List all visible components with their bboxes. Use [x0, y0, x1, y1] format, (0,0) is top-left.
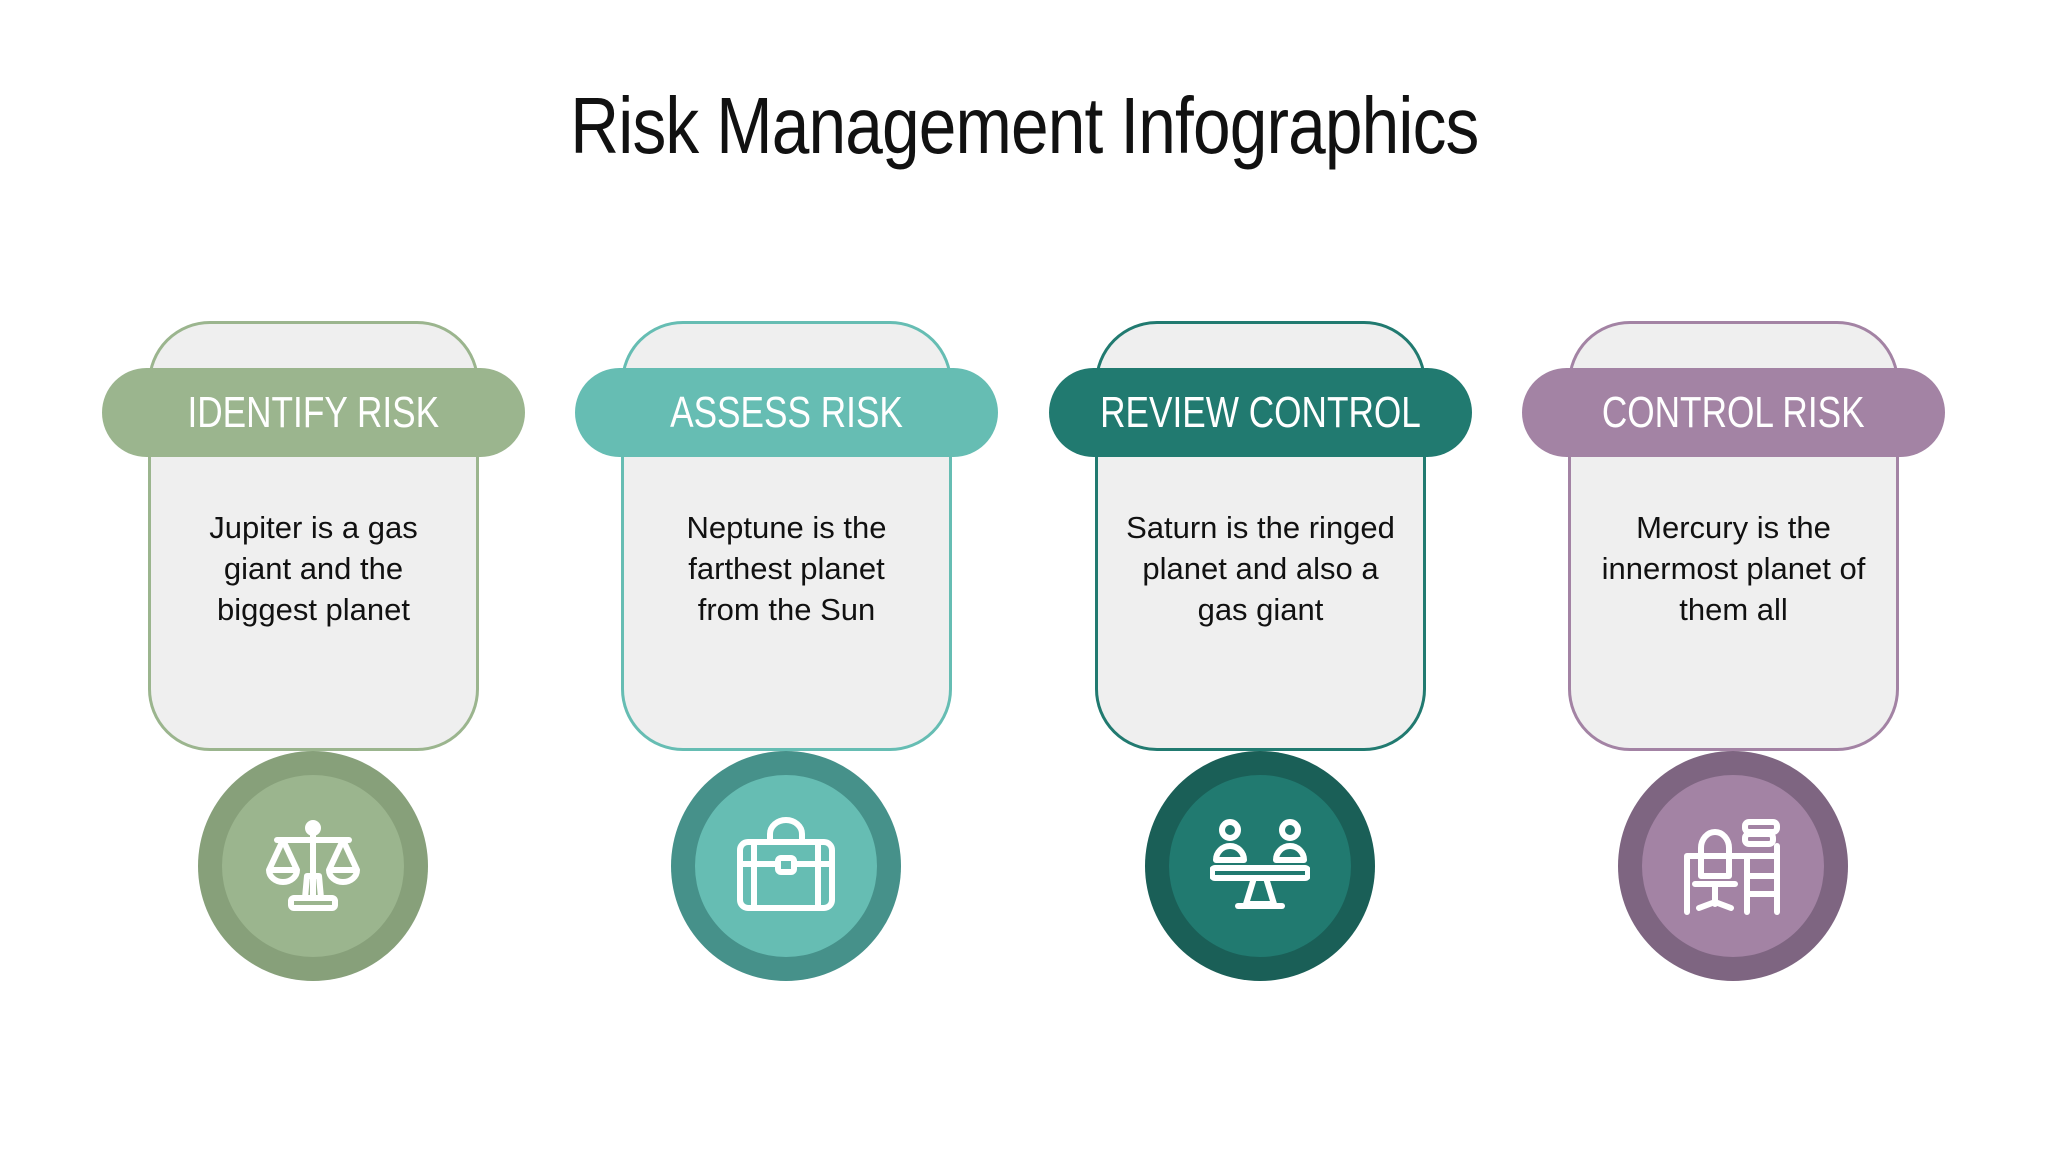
icon: seesaw people [1145, 751, 1375, 981]
description text: Saturn is the ringed [1126, 510, 1395, 545]
icon: desk and chair [1618, 751, 1848, 981]
description text: giant and the [224, 551, 403, 586]
heading pill [1522, 368, 1945, 457]
description text [209, 510, 418, 627]
description text: planet and also a [1142, 551, 1379, 586]
title: Risk Management Infographics [570, 81, 1478, 170]
panel: control risk [1522, 321, 1945, 981]
icon: briefcase [671, 751, 901, 981]
heading pill: ASSESS RISK [670, 388, 903, 437]
panel: identify risk [102, 321, 525, 981]
panel: review control [1049, 321, 1472, 981]
description text: gas giant [1198, 592, 1323, 627]
panel: assess risk [575, 321, 998, 981]
icon: scales [198, 751, 428, 981]
description text [687, 510, 886, 627]
heading pill [1049, 368, 1472, 457]
description text: Neptune is the [687, 510, 886, 545]
heading pill [102, 368, 525, 457]
card [1568, 321, 1899, 751]
description text: from the Sun [698, 592, 875, 627]
description text [1602, 510, 1866, 627]
description text: them all [1679, 592, 1788, 627]
description text: innermost planet of [1602, 551, 1865, 586]
description text: biggest planet [217, 592, 410, 627]
card [621, 321, 952, 751]
description text: Jupiter is a gas [209, 510, 418, 545]
heading pill [575, 368, 998, 457]
heading pill: REVIEW CONTROL [1100, 388, 1421, 437]
description text: Mercury is the [1636, 510, 1831, 545]
card [1095, 321, 1426, 751]
description text: farthest planet [688, 551, 885, 586]
heading pill: IDENTIFY RISK [188, 388, 439, 437]
heading pill: CONTROL RISK [1602, 388, 1865, 437]
description text [1126, 510, 1395, 627]
card [148, 321, 479, 751]
